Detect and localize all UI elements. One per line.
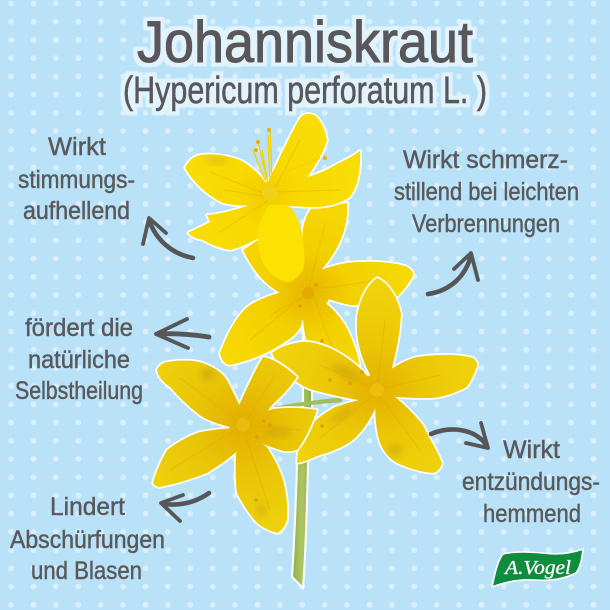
text: wirkt entzündungshemmend: hemmend (483, 500, 581, 528)
text: wirkt stimmungsaufhellend: aufhellend (23, 197, 130, 225)
arrow: abschürfungen (161, 493, 209, 521)
logo: A.Vogel: A.Vogel (503, 557, 571, 579)
text: fördert selbstheilung (15, 314, 143, 405)
flower: second, middle (220, 203, 413, 385)
flower: lower left (153, 357, 317, 533)
text: wirkt entzündungshemmend: Wirkt (503, 436, 560, 464)
arrow: entzündungshemmend (431, 423, 488, 448)
text: fördert selbstheilung: Selbstheilung (15, 377, 143, 405)
text: lindert abschürfungen (10, 493, 165, 585)
text: wirkt stimmungsaufhellend (18, 133, 135, 225)
text: wirkt schmerzstillend: stillend bei leichten (394, 178, 579, 206)
text: fördert selbstheilung: natürliche (28, 346, 130, 374)
stem (270, 300, 342, 588)
text: wirkt schmerzstillend (394, 146, 579, 238)
flower: right (272, 278, 477, 473)
text: lindert abschürfungen: und Blasen (31, 557, 142, 585)
text: wirkt stimmungsaufhellend: Wirkt (48, 133, 106, 161)
text: lindert abschürfungen: Abschürfungen (10, 526, 165, 554)
text: wirkt schmerzstillend: Wirkt schmerz- (403, 146, 568, 174)
text: fördert selbstheilung: fördert die (25, 314, 133, 342)
arrow: schmerzstillend (428, 253, 478, 294)
arrow: stimmungsaufhellend (143, 218, 193, 258)
text: wirkt entzündungshemmend: entzündungs- (462, 468, 600, 496)
logo: A.Vogel (492, 549, 583, 587)
text: lindert abschürfungen: Lindert (50, 493, 125, 521)
arrow: selbstheilung (156, 319, 209, 348)
subtitle: (Hypericum perforatum L. ) (123, 70, 487, 112)
text: wirkt entzündungshemmend (462, 436, 600, 528)
title: Johanniskraut (137, 10, 473, 75)
text: wirkt stimmungsaufhellend: stimmungs- (18, 166, 135, 194)
plant illustration (153, 114, 477, 588)
text: wirkt schmerzstillend: Verbrennungen (412, 210, 560, 238)
flower: top (185, 114, 360, 282)
